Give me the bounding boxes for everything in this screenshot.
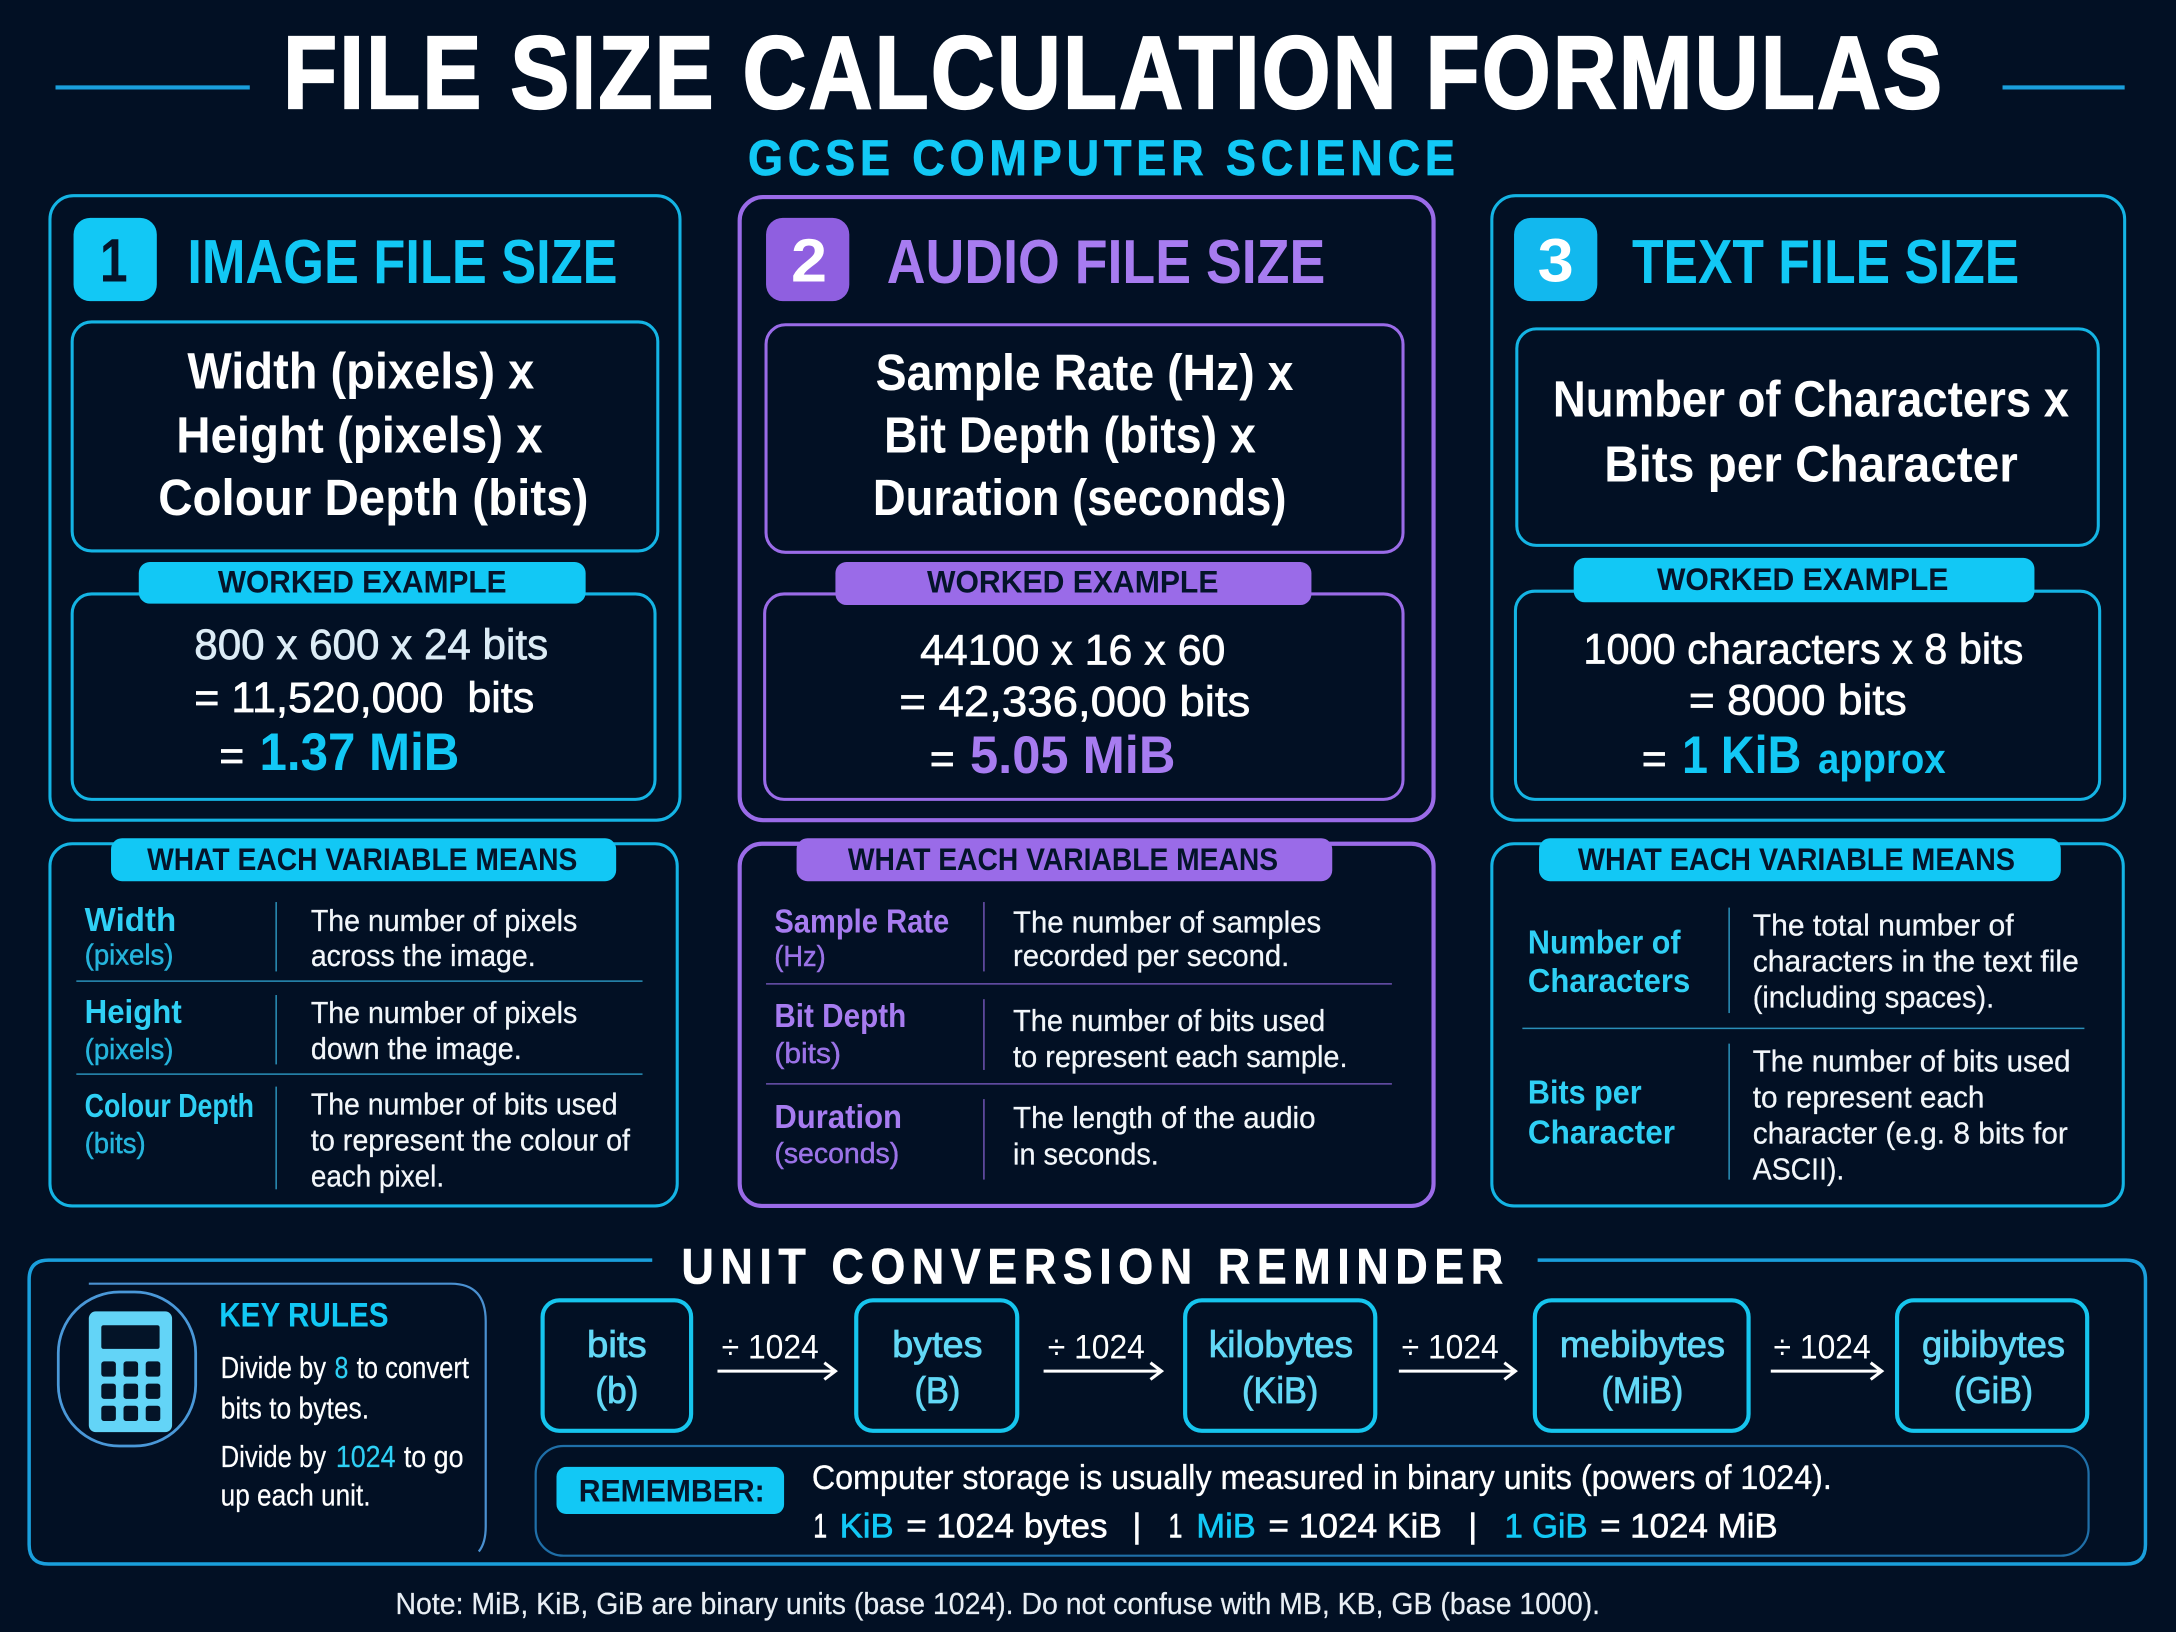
- variable: sample rate: The number of samples: [1013, 906, 1321, 940]
- arrow: bytes to kilobytes: [1044, 1329, 1162, 1379]
- remember callout: 1: [813, 1508, 827, 1546]
- variable: sample rate: recorded per second.: [1013, 939, 1289, 973]
- formula box: audio: Bit Depth (bits) x: [884, 406, 1256, 463]
- badge 3: 3: [1538, 227, 1574, 295]
- variable: height: Height: [85, 994, 182, 1031]
- worked example: text: 1 KiB: [1682, 726, 1801, 785]
- footer note: Note: MiB, KiB, GiB are binary units (base 1024). Do not confuse with MB, KB, GB (base 1000).: [396, 1587, 1600, 1621]
- title: FILE SIZE CALCULATION FORMULAS: [283, 16, 1942, 131]
- unit: bits: (b): [595, 1369, 638, 1411]
- unit: mebibytes: (MiB): [1601, 1369, 1683, 1411]
- variable: bit depth: Bit Depth: [774, 998, 906, 1035]
- variable: width: across the image.: [311, 939, 536, 973]
- variable: bits per character: The number of bits used: [1753, 1044, 2071, 1078]
- unit: bytes: [856, 1300, 1017, 1431]
- variable: bit depth: to represent each sample.: [1013, 1040, 1348, 1074]
- worked example: text: WORKED EXAMPLE: [1657, 561, 1948, 597]
- panel: audio variables: WHAT EACH VARIABLE MEANS: [848, 841, 1278, 877]
- formula box: image: Colour Depth (bits): [158, 469, 588, 526]
- variable: bit depth: (bits): [774, 1038, 841, 1070]
- remember callout: |: [1132, 1508, 1141, 1546]
- variable: bits per character: [1528, 1044, 2071, 1187]
- unit: mebibytes: mebibytes: [1560, 1323, 1725, 1365]
- variable: height: [85, 994, 577, 1066]
- key rules text: [221, 1351, 469, 1513]
- key rules text: up each unit.: [221, 1479, 371, 1513]
- remember callout: = 1024 MiB: [1600, 1508, 1778, 1546]
- unit: bits: [543, 1300, 691, 1431]
- panel: audio file size: [740, 197, 1434, 820]
- variable: number of characters: The total number of: [1753, 908, 2014, 942]
- worked example: text: = 8000 bits: [1689, 677, 1907, 725]
- variable: colour depth: The number of bits used: [311, 1087, 618, 1121]
- unit: mebibytes: [1535, 1300, 1749, 1431]
- formula box: image: Width (pixels) x: [187, 343, 535, 400]
- remember callout: REMEMBER:: [579, 1473, 765, 1509]
- arrow: bits to bytes: [717, 1329, 835, 1379]
- variable: number of characters: Number of: [1528, 924, 1681, 961]
- unit: kilobytes: kilobytes: [1209, 1323, 1353, 1365]
- formula box: audio: Duration (seconds): [873, 469, 1286, 526]
- variable: bit depth: The number of bits used: [1013, 1004, 1325, 1038]
- heading: unit conversion: UNIT CONVERSION REMINDER: [681, 1240, 1503, 1295]
- variable: colour depth: [85, 1087, 631, 1194]
- panel: text file size: [1492, 196, 2125, 820]
- icon: calculator: [58, 1292, 196, 1446]
- key rules text: 1024: [336, 1440, 396, 1474]
- formula box: text: Bits per Character: [1604, 436, 2018, 493]
- worked example: image: = 11,520,000 bits: [194, 674, 534, 722]
- variable: sample rate: [774, 904, 1321, 973]
- key rules heading: KEY RULES: [219, 1297, 389, 1335]
- variable: bits per character: Character: [1528, 1115, 1675, 1152]
- panel: audio variables: [740, 838, 1434, 1206]
- arrow: bits to bytes: ÷ 1024: [722, 1329, 819, 1367]
- worked example: image: =: [219, 732, 244, 780]
- variable: bit depth: [774, 998, 1348, 1074]
- unit: kilobytes: [1185, 1300, 1375, 1431]
- variable: bits per character: Bits per: [1528, 1074, 1642, 1111]
- heading: image file size: IMAGE FILE SIZE: [187, 227, 618, 297]
- formula box: audio: [766, 325, 1403, 552]
- variable: number of characters: [1528, 908, 2079, 1015]
- arrow: mebibytes to gibibytes: ÷ 1024: [1774, 1329, 1871, 1367]
- worked example: image: 1.37 MiB: [260, 723, 459, 782]
- variable: bits per character: ASCII).: [1753, 1153, 1844, 1187]
- panel: image variables: WHAT EACH VARIABLE MEANS: [147, 841, 577, 877]
- remember callout: = 1024 bytes: [906, 1508, 1107, 1546]
- worked example: audio: WORKED EXAMPLE: [927, 564, 1218, 600]
- panel: image file size: [50, 196, 680, 820]
- key rules text: to convert: [357, 1351, 469, 1385]
- worked example: image: 800 x 600 x 24 bits: [194, 621, 548, 669]
- worked example: audio: =: [930, 735, 955, 783]
- remember callout: KiB: [840, 1508, 894, 1546]
- unit: gibibytes: [1897, 1300, 2087, 1431]
- remember callout: 1 GiB: [1504, 1508, 1588, 1546]
- panel: unit conversion reminder: [29, 1240, 2145, 1564]
- remember callout: |: [1468, 1508, 1477, 1546]
- variable: number of characters: (including spaces).: [1753, 981, 1994, 1015]
- variable: width: The number of pixels: [311, 904, 577, 938]
- worked example: audio: 44100 x 16 x 60: [920, 627, 1225, 675]
- arrow: kilobytes to mebibytes: [1399, 1329, 1515, 1379]
- remember callout: MiB: [1196, 1508, 1256, 1546]
- variable: colour depth: to represent the colour of: [311, 1123, 631, 1157]
- variable: duration: The length of the audio: [1013, 1101, 1316, 1135]
- heading: text file size: TEXT FILE SIZE: [1632, 227, 2019, 297]
- variable: duration: Duration: [774, 1099, 902, 1136]
- worked example: image: [72, 562, 655, 799]
- variable: number of characters: Characters: [1528, 963, 1690, 1000]
- key rules text: bits to bytes.: [221, 1391, 369, 1425]
- variable: duration: [774, 1099, 1316, 1171]
- variable: colour depth: (bits): [85, 1128, 146, 1160]
- variable: height: down the image.: [311, 1032, 522, 1066]
- formula box: audio: Sample Rate (Hz) x: [876, 344, 1294, 401]
- remember callout: [536, 1446, 2089, 1556]
- variable: height: The number of pixels: [311, 996, 577, 1030]
- formula box: text: [1517, 329, 2098, 545]
- panel: text variables: WHAT EACH VARIABLE MEANS: [1578, 841, 2015, 877]
- remember callout: = 1024 KiB: [1268, 1508, 1442, 1546]
- heading: audio file size: AUDIO FILE SIZE: [887, 227, 1325, 297]
- worked example: text: =: [1642, 735, 1667, 783]
- worked example: text: approx: [1818, 735, 1946, 782]
- variable: height: (pixels): [85, 1034, 173, 1066]
- worked example: text: 1000 characters x 8 bits: [1583, 625, 2023, 673]
- worked example: audio: = 42,336,000 bits: [899, 678, 1250, 726]
- badge 1: [74, 218, 157, 301]
- subtitle: GCSE COMPUTER SCIENCE: [748, 131, 1455, 186]
- arrow: kilobytes to mebibytes: ÷ 1024: [1402, 1329, 1499, 1367]
- variable: sample rate: (Hz): [774, 941, 826, 973]
- worked example: audio: 5.05 MiB: [970, 726, 1175, 785]
- variable: width: (pixels): [85, 939, 173, 971]
- variable: colour depth: Colour Depth: [85, 1088, 254, 1125]
- variable: width: [85, 902, 577, 973]
- formula box: text: Number of Characters x: [1553, 370, 2070, 427]
- unit: gibibytes: (GiB): [1954, 1369, 2033, 1411]
- variable: duration: (seconds): [774, 1138, 899, 1170]
- remember callout: Computer storage is usually measured in binary units (powers of 1024).: [812, 1459, 1832, 1497]
- badge 2: 2: [791, 227, 827, 295]
- key rules text: to go: [404, 1440, 464, 1474]
- unit: bits: bits: [587, 1323, 647, 1365]
- key rules text: Divide by: [221, 1440, 327, 1474]
- formula box: image: [72, 322, 658, 551]
- arrow: bytes to kilobytes: ÷ 1024: [1048, 1329, 1145, 1367]
- variable: bits per character: to represent each: [1753, 1080, 1984, 1114]
- variable: colour depth: each pixel.: [311, 1160, 444, 1194]
- unit: gibibytes: gibibytes: [1922, 1323, 2065, 1365]
- key rules text: Divide by: [221, 1351, 327, 1385]
- unit: kilobytes: (KiB): [1242, 1369, 1318, 1411]
- badge 2: [766, 218, 849, 301]
- worked example: image: WORKED EXAMPLE: [218, 564, 507, 600]
- variable: bits per character: character (e.g. 8 bits for: [1753, 1117, 2068, 1151]
- panel: image variables: [50, 838, 677, 1206]
- unit: bytes: (B): [915, 1369, 960, 1411]
- remember callout: 1: [1168, 1508, 1182, 1546]
- badge 3: [1514, 218, 1597, 301]
- formula box: image: Height (pixels) x: [176, 406, 543, 463]
- key rules panel: [58, 1284, 486, 1552]
- worked example: text: [1515, 558, 2100, 799]
- badge 1: 1: [100, 227, 128, 295]
- variable: width: Width: [85, 902, 176, 939]
- worked example: audio: [765, 562, 1403, 799]
- unit: bytes: bytes: [892, 1323, 983, 1365]
- panel: text variables: [1492, 838, 2123, 1206]
- key rules text: 8: [334, 1351, 348, 1385]
- variable: sample rate: Sample Rate: [774, 904, 949, 941]
- header: [56, 16, 2125, 186]
- variable: number of characters: characters in the text file: [1753, 944, 2079, 978]
- variable: duration: in seconds.: [1013, 1137, 1159, 1171]
